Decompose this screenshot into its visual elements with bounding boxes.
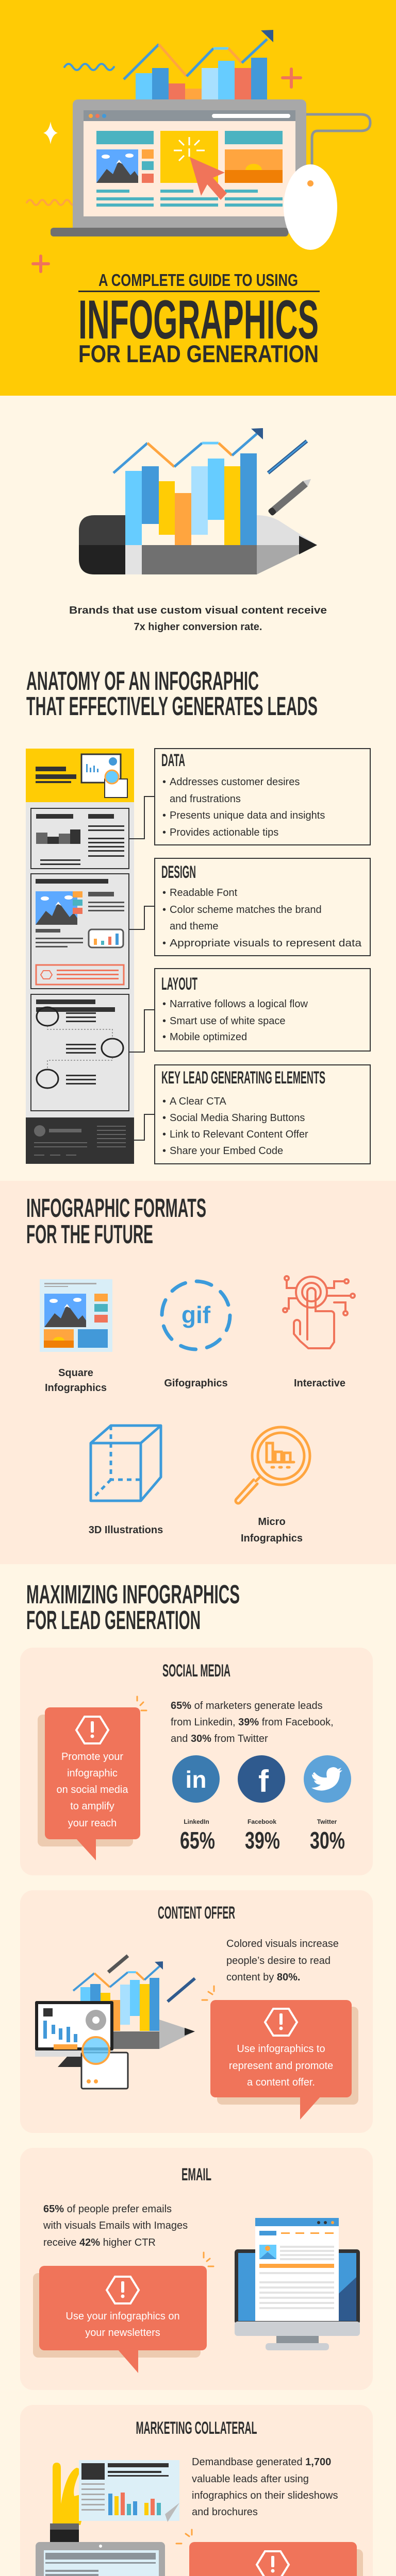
panel: data [155,749,370,845]
panel: marketing collateral [20,2405,373,2576]
stats: social percentages: Twitter [317,1818,337,1825]
label: interactive: Interactive [294,1378,345,1389]
text: demandbase stat: infographics on their slideshows [192,2490,338,2501]
text: colored visuals stat: people’s desire to read [226,1955,331,1967]
text: email stat: 65% of people prefer emails [43,2204,172,2215]
text: email stat: with visuals Emails with Images [43,2220,188,2231]
heading: formats [26,1193,206,1249]
header bar chart with trend line [124,30,273,99]
laptop with mouse illustration [27,99,370,250]
panel: design: Appropriate visuals to represent data [170,938,362,949]
panel: layout: Narrative follows a logical flow [170,998,308,1010]
panel: key lead generating elements: Link to Relevant Content Offer [170,1129,308,1140]
stat text: custom visual content: Brands that use custom visual content receive [69,605,327,616]
callout: content offer: represent and promote [229,2060,333,2072]
pencil bar chart illustration [79,428,317,574]
panel: email: EMAIL [182,2165,211,2184]
icon: micro infographics [236,1427,310,1503]
callout: newsletters: your newsletters [85,2327,160,2338]
stats: social percentages: LinkedIn [184,1818,209,1825]
panel: design: Readable Font [170,887,238,899]
text: social stats: from Linkedin, 39% from Facebook, [171,1717,334,1728]
label: square infographics: Infographics [45,1382,107,1394]
text: colored visuals stat: Colored visuals increase [226,1938,339,1950]
panel: layout: • [162,1031,166,1043]
panel: social media: SOCIAL MEDIA [162,1661,230,1681]
text: social stats: 65% of marketers generate leads [171,1700,323,1711]
icon: facebook [238,1755,285,1803]
stats: social percentages: 30% [310,1827,345,1854]
stats: social percentages: Facebook [248,1818,276,1825]
panel: key lead generating elements: A Clear CTA [170,1096,226,1107]
panel: data: • [162,776,166,788]
icon: facebook: f [258,1764,269,1799]
illustration: charts and monitor [35,1956,195,2089]
icon: twitter [304,1755,351,1803]
panel: design: and theme [170,921,219,932]
callout: repurpose [176,2530,363,2576]
heading: anatomy [26,666,318,721]
panel: data: • [162,810,166,821]
panel: data: Presents unique data and insights [170,810,325,821]
callout: content offer: a content offer. [247,2077,315,2088]
text: social stats [171,1700,334,1744]
stats: social percentages [180,1818,345,1854]
icon: linkedin [172,1755,220,1803]
callout: promote on social media: Promote your [61,1751,123,1762]
callout: promote on social media: your reach [68,1818,117,1829]
text: colored visuals stat: content by 80%. [226,1972,300,1983]
panel: design: • [162,904,166,916]
text: demandbase stat: Demandbase generated 1,700 [192,2456,331,2468]
stat text: custom visual content [69,605,327,633]
callout: newsletters: Use your infographics on [65,2311,180,2322]
panel: layout [155,969,370,1051]
title [78,270,320,367]
label: micro infographics [241,1516,303,1544]
label: micro infographics: Micro [258,1516,286,1528]
icon: interactive [283,1276,355,1348]
icon: linkedin: in [186,1766,206,1793]
panel: design: Color scheme matches the brand [170,904,322,916]
panel: layout: LAYOUT [161,974,197,994]
panel: key lead generating elements: • [162,1112,166,1124]
panel: layout: Mobile optimized [170,1031,247,1043]
label: square infographics [45,1367,107,1394]
icon: gifographics: gif [182,1301,211,1328]
callout: content offer: Use infographics to [237,2043,325,2055]
callout: promote on social media: to amplify [70,1801,114,1812]
title: FOR LEAD GENERATION [78,340,319,367]
text: social stats: and 30% from Twitter [171,1733,268,1744]
text: demandbase stat: valuable leads after using [192,2473,309,2485]
panel: marketing collateral: MARKETING COLLATERAL [136,2418,257,2438]
panel: key lead generating elements: • [162,1145,166,1157]
panel: data: Provides actionable tips [170,827,278,838]
heading: maximizing [26,1580,240,1635]
icon: blue wave [64,64,114,70]
icon: gifographics [162,1281,230,1349]
stats: social percentages: 39% [245,1827,280,1854]
callout: content offer [202,1986,358,2120]
connector lines [129,796,155,1140]
callout: promote on social media [38,1697,146,1860]
section backgrounds [0,1181,396,2576]
panel: key lead generating elements: Share your Embed Code [170,1145,283,1157]
panel: design: • [162,887,166,899]
panel: content offer: CONTENT OFFER [158,1903,235,1923]
text: email stat: receive 42% higher CTR [43,2237,156,2248]
panel: social media [20,1648,373,1875]
icon: 3D cube [91,1426,161,1501]
icon: square infographics [40,1279,112,1352]
header background [0,0,396,396]
panel: design [155,858,370,956]
panel: data: and frustrations [170,793,241,805]
panel: layout: Smart use of white space [170,1015,286,1027]
text: email stat [43,2204,188,2248]
panel: design: DESIGN [161,862,196,882]
text: colored visuals stat [226,1938,339,1983]
heading: maximizing: MAXIMIZING INFOGRAPHICS [26,1580,240,1609]
text: demandbase stat: and brochures [192,2506,258,2518]
text: demandbase stat [192,2456,338,2518]
panel: data: • [162,827,166,838]
panel: key lead generating elements: • [162,1096,166,1107]
anatomy illustration: infographic wireframe [26,749,134,1164]
panel: layout: • [162,1015,166,1027]
panel: design: • [162,938,166,949]
label: gifographics: Gifographics [164,1378,228,1389]
stat text: custom visual content: 7x higher conversion rate. [134,621,262,633]
panel: email [20,2148,373,2390]
icon: white sparkle [43,122,58,144]
panel: key lead generating elements [155,1065,370,1164]
heading: maximizing: FOR LEAD GENERATION [26,1605,201,1635]
panel: layout: • [162,998,166,1010]
label: 3D illustrations: 3D Illustrations [89,1524,163,1536]
heading: formats: FOR THE FUTURE [26,1219,153,1249]
icon: plus signs [33,69,301,272]
stats: social percentages: 65% [180,1827,215,1854]
illustration: email monitor [235,2218,360,2350]
panel: content offer [20,1890,373,2133]
heading: formats: INFOGRAPHIC FORMATS [26,1193,206,1223]
panel: data: Addresses customer desires [170,776,300,788]
panel: key lead generating elements: • [162,1129,166,1140]
title: A COMPLETE GUIDE TO USING [98,270,298,290]
callout: promote on social media: on social media [57,1784,128,1795]
panel: key lead generating elements: Social Media Sharing Buttons [170,1112,305,1124]
label: micro infographics: Infographics [241,1533,303,1544]
callout: newsletters [33,2252,213,2373]
illustration: hand with document and laptop [30,2460,179,2576]
panel: data: DATA [161,751,185,770]
callout: promote on social media: infographic [67,1768,118,1779]
label: square infographics: Square [58,1367,93,1379]
